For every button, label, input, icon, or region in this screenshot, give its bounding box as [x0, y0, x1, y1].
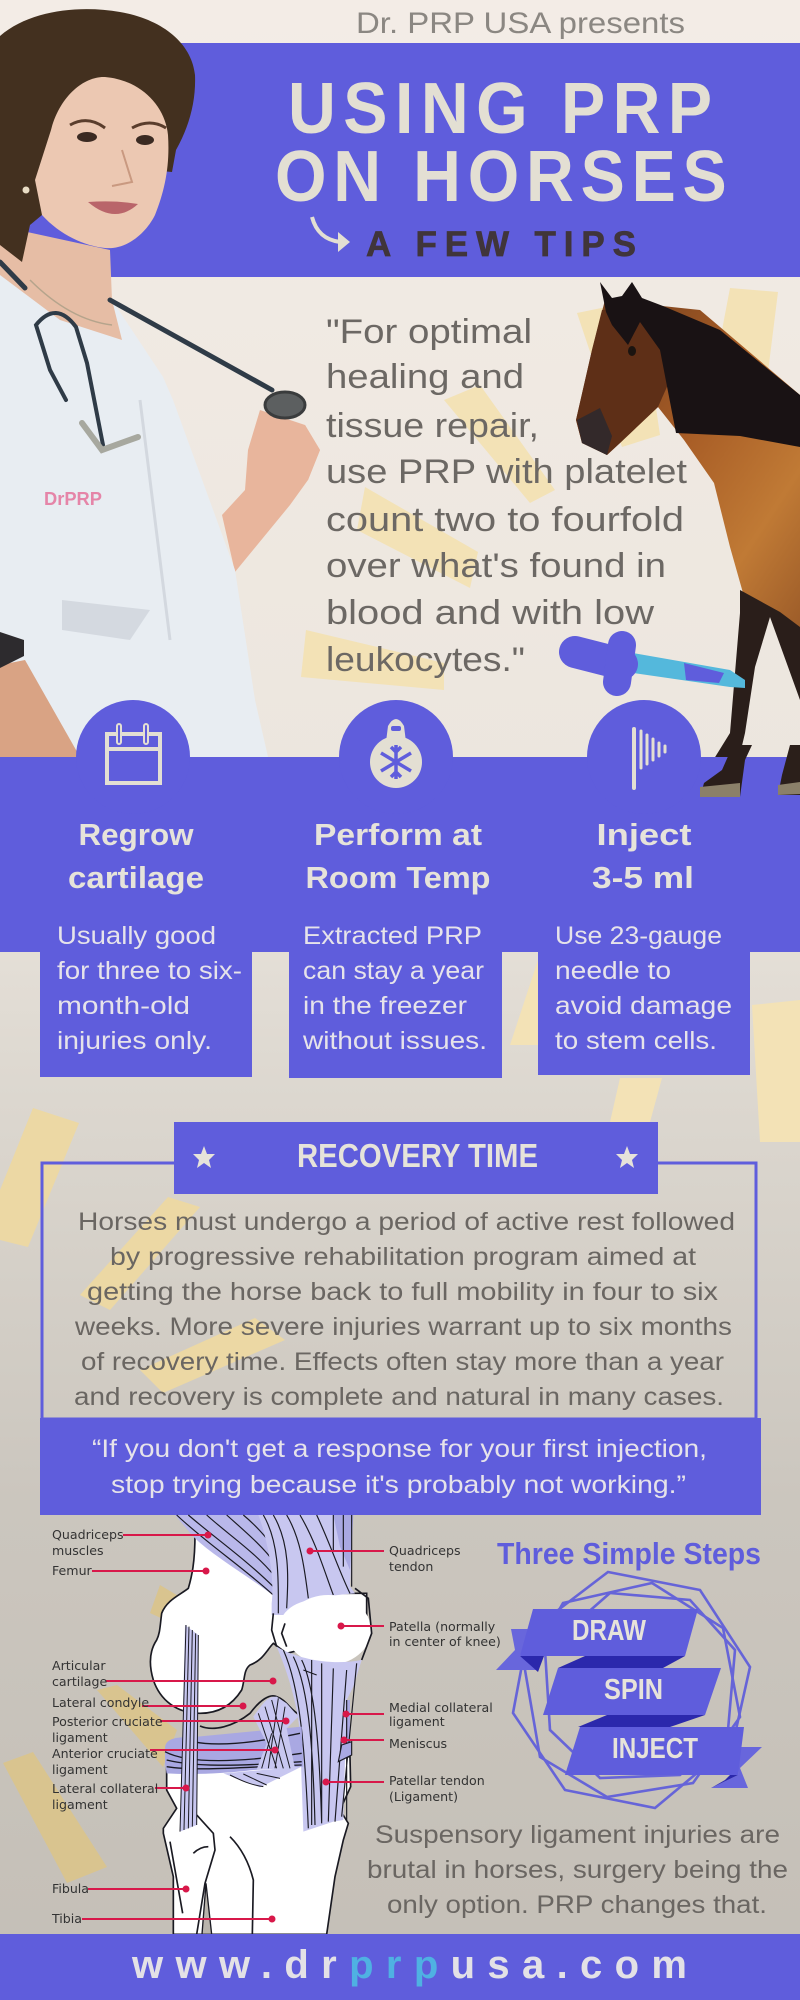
horse mane: [600, 282, 800, 447]
photo: horse: [576, 282, 800, 783]
subtitle: A FEW TIPS: [366, 225, 636, 264]
coat: [0, 265, 268, 757]
right anatomy labels: in center of knee): [389, 1634, 501, 1649]
horse body: [576, 300, 800, 640]
suspensory ligament note: Suspensory ligament injuries are: [375, 1821, 780, 1849]
facial features: [70, 121, 166, 214]
heading: [68, 817, 204, 895]
body text: Use 23-gauge: [555, 922, 722, 950]
neck: [0, 230, 122, 340]
meniscus right part: [338, 1742, 352, 1762]
recovery heading bar: RECOVERY TIME: [297, 1137, 538, 1174]
ribbon: spin: SPIN: [604, 1674, 663, 1706]
recovery body text: and recovery is complete and natural in many cases.: [74, 1383, 724, 1411]
body text: [555, 922, 732, 1055]
ribbon: inject: INJECT: [612, 1733, 698, 1765]
right anatomy labels: Patellar tendon: [389, 1773, 485, 1788]
left anatomy labels: Posterior cruciate: [52, 1714, 163, 1729]
three simple steps heading: Three Simple Steps: [497, 1536, 761, 1571]
heading: Inject: [596, 817, 692, 852]
patellar tendon lines: [283, 1650, 357, 1828]
recovery body text: getting the horse back to full mobility in four to six: [87, 1278, 719, 1306]
meniscus: [165, 1727, 303, 1774]
body text: [57, 922, 242, 1055]
pointer lines: [82, 1535, 384, 1919]
body text: [302, 922, 487, 1055]
heading: Room Temp: [306, 860, 490, 895]
ribbon folds: [520, 1656, 738, 1788]
fibula detail lines: [170, 1815, 253, 1934]
purple tips band: [0, 700, 800, 952]
body text: for three to six-: [57, 957, 242, 985]
coat logo: DrPRP: [44, 489, 102, 509]
right anatomy labels: tendon: [389, 1559, 433, 1574]
lower condyle line: [200, 1696, 300, 1728]
body text: to stem cells.: [555, 1027, 717, 1055]
hair: [0, 9, 195, 262]
pull quote: leukocytes.": [326, 641, 525, 679]
right anatomy labels: [389, 1543, 501, 1804]
right anatomy labels: Patella (normally: [389, 1619, 496, 1634]
title: [275, 67, 727, 217]
quadriceps muscle lines: [177, 1515, 275, 1597]
right anatomy labels: Quadriceps: [389, 1543, 461, 1558]
photo: doctor: [0, 9, 320, 757]
left anatomy labels: cartilage: [52, 1674, 107, 1689]
left anatomy labels: Fibula: [52, 1881, 89, 1896]
suspensory ligament note: [367, 1821, 788, 1919]
panel: recovery time: [42, 1122, 756, 1419]
left anatomy labels: Lateral condyle: [52, 1695, 149, 1710]
panel: inject: [538, 729, 750, 1075]
quadriceps tendon: [258, 1515, 355, 1615]
pull quote: use PRP with platelet: [326, 453, 688, 491]
left anatomy labels: [51, 1527, 163, 1926]
ribbon: inject: [565, 1727, 744, 1775]
patellar tendon: [277, 1647, 362, 1832]
background yellow stripes: [0, 288, 800, 1883]
ribbon: spin: [543, 1668, 721, 1715]
necklace: [30, 280, 112, 325]
heading: [592, 817, 694, 895]
left anatomy labels: Femur: [52, 1563, 93, 1578]
ribbon steps: [496, 1609, 762, 1788]
horse front legs: [699, 590, 800, 783]
tendon side strip: [333, 1515, 353, 1570]
body text: Extracted PRP: [303, 922, 482, 950]
quote bar: “If you don't get a response for your first injection,: [92, 1435, 707, 1463]
title: USING PRP: [288, 67, 712, 149]
horse hooves over band: [700, 745, 800, 797]
pull quote: count two to fourfold: [326, 501, 684, 539]
recovery body text: Horses must undergo a period of active rest followed: [78, 1208, 735, 1236]
body text: month-old: [57, 992, 190, 1020]
right anatomy labels: Meniscus: [389, 1736, 447, 1751]
lateral ligament lines: [180, 1625, 198, 1832]
panel: room temp: [289, 719, 502, 1078]
horse head shading: [576, 305, 670, 455]
pull quote: [326, 313, 688, 679]
heading: Perform at: [314, 817, 482, 852]
body text: Usually good: [57, 922, 216, 950]
ribbon: draw: DRAW: [572, 1615, 647, 1647]
pointer dots: [182, 1532, 350, 1922]
right anatomy labels: ligament: [389, 1714, 445, 1729]
earring: [22, 186, 30, 194]
icon: dropper: [575, 645, 745, 688]
left anatomy labels: Articular: [52, 1658, 106, 1673]
cruciate lines: [258, 1698, 290, 1768]
left anatomy labels: Lateral collateral: [52, 1781, 158, 1796]
body text: without issues.: [302, 1027, 487, 1055]
suspensory ligament note: brutal in horses, surgery being the: [367, 1856, 788, 1884]
icon: freezer weight: [370, 719, 422, 788]
presenter line: Dr. PRP USA presents: [356, 7, 685, 40]
body text: injuries only.: [57, 1027, 212, 1055]
heading: cartilage: [68, 860, 204, 895]
quote bar: stop trying because it's probably not working.”: [111, 1471, 686, 1499]
lateral collateral ligament: [180, 1625, 198, 1832]
tibia and fibula bones: [163, 1757, 351, 1934]
header band: [0, 43, 800, 277]
polygon frame: [513, 1572, 750, 1808]
recovery body text: [74, 1208, 735, 1411]
pull quote: blood and with low: [326, 594, 655, 632]
body text: needle to: [555, 957, 671, 985]
meniscus lines: [165, 1733, 302, 1769]
fingers over chest piece: [296, 425, 320, 480]
horse muzzle: [577, 408, 612, 455]
body text: can stay a year: [303, 957, 484, 985]
recovery body text: weeks. More severe injuries warrant up to six months: [74, 1313, 732, 1341]
left anatomy labels: Tibia: [51, 1911, 82, 1926]
recovery heading bar: [174, 1122, 658, 1194]
pull quote: tissue repair,: [326, 407, 539, 445]
heading: [306, 817, 490, 895]
footer bar: www.dr prp usa.com: [131, 1943, 687, 1987]
meniscus lower fibres: [223, 1767, 302, 1787]
tendon lines: [263, 1515, 352, 1613]
pull quote: "For optimal: [326, 313, 532, 351]
ribbon tails: [496, 1629, 762, 1788]
icon: curved arrow: [312, 217, 350, 252]
icon: calendar: [107, 726, 160, 783]
footer bar: [0, 1934, 800, 2000]
right anatomy labels: (Ligament): [389, 1789, 458, 1804]
heading: Regrow: [78, 817, 194, 852]
suspensory ligament note: only option. PRP changes that.: [387, 1891, 767, 1919]
body text: avoid damage: [555, 992, 732, 1020]
left anatomy labels: ligament: [52, 1762, 108, 1777]
recovery body text: by progressive rehabilitation program aimed at: [110, 1243, 696, 1271]
left anatomy labels: Anterior cruciate: [52, 1746, 158, 1761]
ribbon: draw: [520, 1609, 698, 1656]
pull quote: healing and: [326, 358, 524, 396]
body text: in the freezer: [303, 992, 467, 1020]
horse eye: [628, 346, 636, 356]
femur bone: [150, 1533, 367, 1713]
cruciate ligaments: [253, 1697, 298, 1769]
medial collateral ligament: [342, 1700, 350, 1743]
left anatomy labels: Quadriceps: [52, 1527, 124, 1542]
recovery body text: of recovery time. Effects often stay more than a year: [81, 1348, 724, 1376]
heading: 3-5 ml: [592, 860, 694, 895]
arm and hand: [222, 410, 320, 572]
left anatomy labels: muscles: [52, 1543, 104, 1558]
pull quote: over what's found in: [326, 547, 666, 585]
left anatomy labels: ligament: [52, 1730, 108, 1745]
lower arm and sleeve: [0, 660, 80, 757]
panel: regrow cartilage: [40, 726, 252, 1077]
quadriceps muscles: [175, 1515, 277, 1598]
patella bone: [286, 1595, 371, 1665]
face: [35, 77, 168, 248]
gap between fibula and tibia: [202, 1883, 212, 1934]
icon: flag: [634, 729, 665, 788]
knee diagram: [51, 1515, 501, 1934]
right anatomy labels: Medial collateral: [389, 1700, 493, 1715]
quote bar: [40, 1418, 761, 1515]
left anatomy labels: ligament: [52, 1797, 108, 1812]
title: ON HORSES: [275, 135, 727, 217]
knee anatomy drawing: [150, 1515, 372, 1934]
stethoscope: [0, 262, 305, 450]
patella outline: [272, 1588, 372, 1660]
